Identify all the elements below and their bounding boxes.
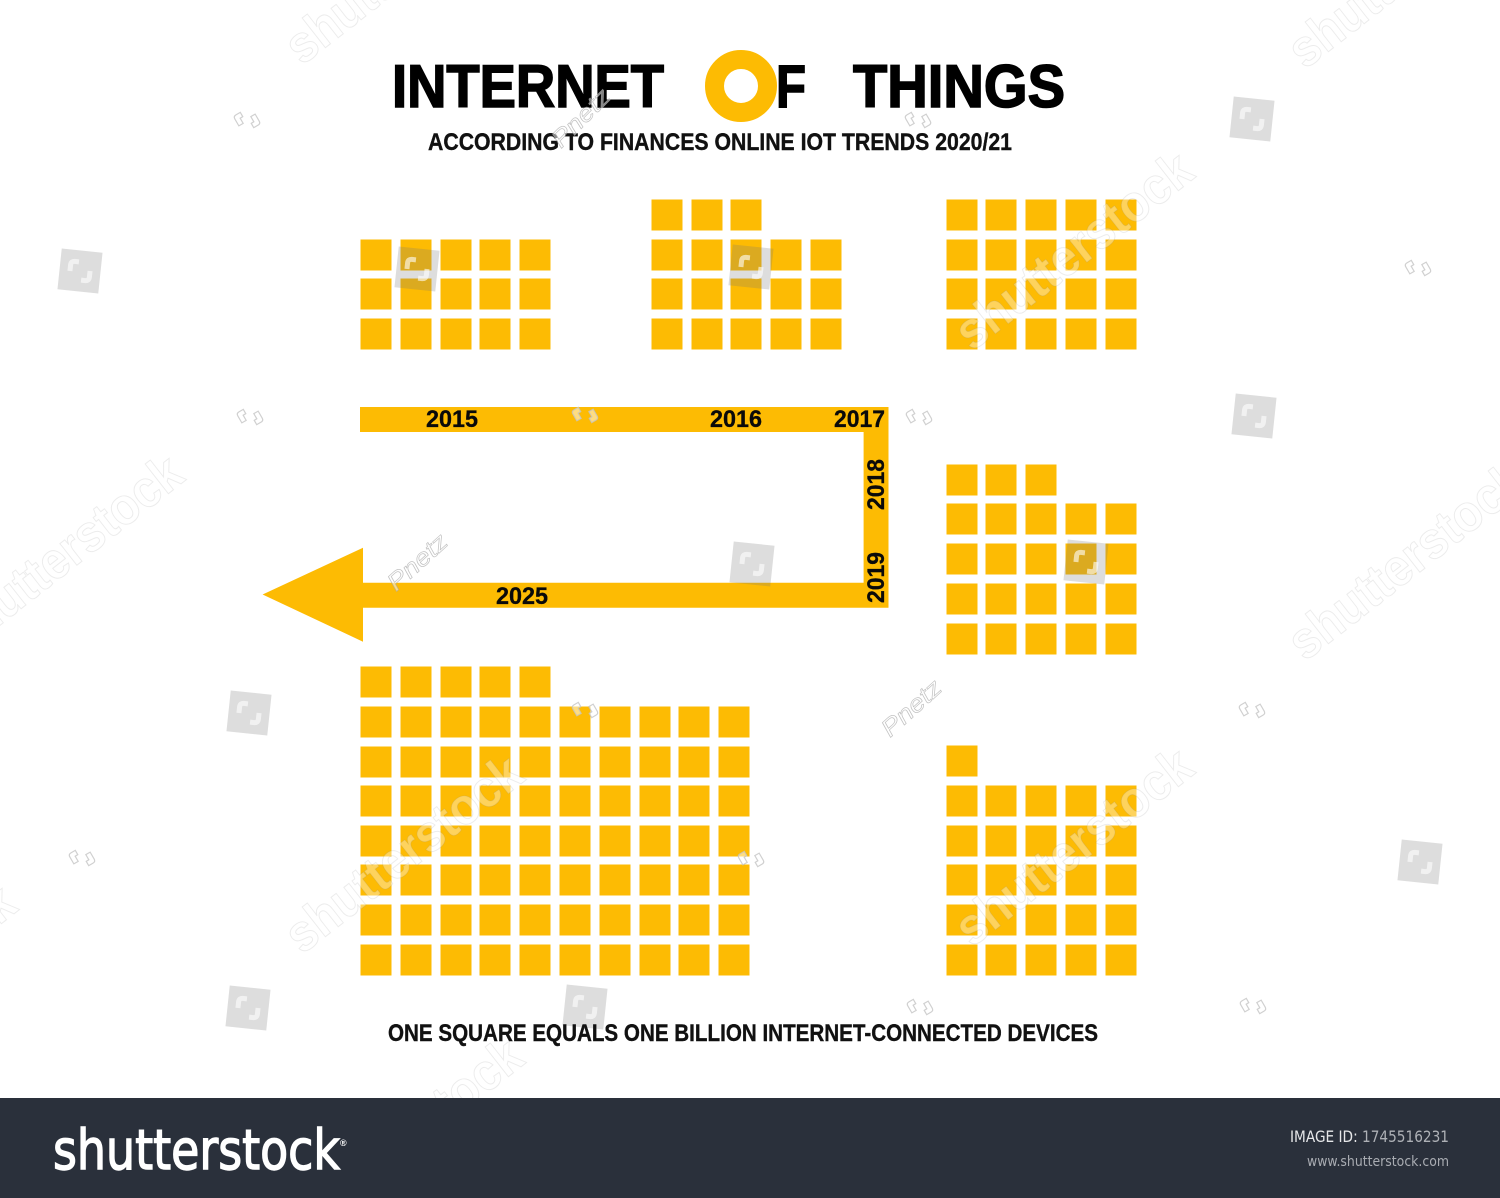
logo wordmark: shutterstock [53, 1118, 340, 1182]
watermark text: shutterstock [274, 743, 534, 964]
footnote: ONE SQUARE EQUALS ONE BILLION INTERNET-CONNECTED DEVICES [388, 1020, 1098, 1047]
year labels: 2017 [834, 406, 885, 433]
icon: yellow ring letter O [714, 60, 768, 112]
title: INTERNET [392, 53, 664, 120]
watermark badges [57, 96, 1443, 1031]
squares: 2018 [946, 464, 1136, 654]
squares: 2017 [946, 200, 1136, 350]
watermark author marks [382, 83, 948, 742]
squares: 2019 [946, 746, 1136, 976]
squares: 2015 [360, 240, 550, 350]
year labels: 2018 [863, 459, 890, 510]
watermark author marks: Pnetz [876, 674, 948, 742]
year labels: 2015 [426, 406, 478, 433]
small watermark swirls [68, 106, 1432, 1021]
subtitle: ACCORDING TO FINANCES ONLINE IOT TRENDS 2020/21 [428, 129, 1012, 156]
watermark author marks: Pnetz [382, 528, 454, 596]
registered mark: ® [340, 1138, 347, 1148]
watermark author marks: Pnetz [546, 83, 616, 153]
watermark text: shutterstock [944, 140, 1204, 361]
title: F [776, 53, 806, 120]
year labels: 2016 [710, 406, 762, 433]
image id: IMAGE ID: 1745516231 [1290, 1127, 1449, 1146]
footer banner [0, 1098, 1500, 1198]
title: THINGS [853, 53, 1065, 120]
watermark text: shutterstock [944, 736, 1204, 957]
squares: 2016 [652, 200, 842, 350]
year labels: 2025 [496, 583, 548, 610]
title [392, 53, 1065, 120]
year labels [426, 406, 890, 610]
site url: www.shutterstock.com [1307, 1154, 1449, 1170]
squares: 2025 [360, 666, 750, 976]
arrow: timeline [263, 407, 889, 642]
year labels: 2019 [863, 552, 890, 603]
